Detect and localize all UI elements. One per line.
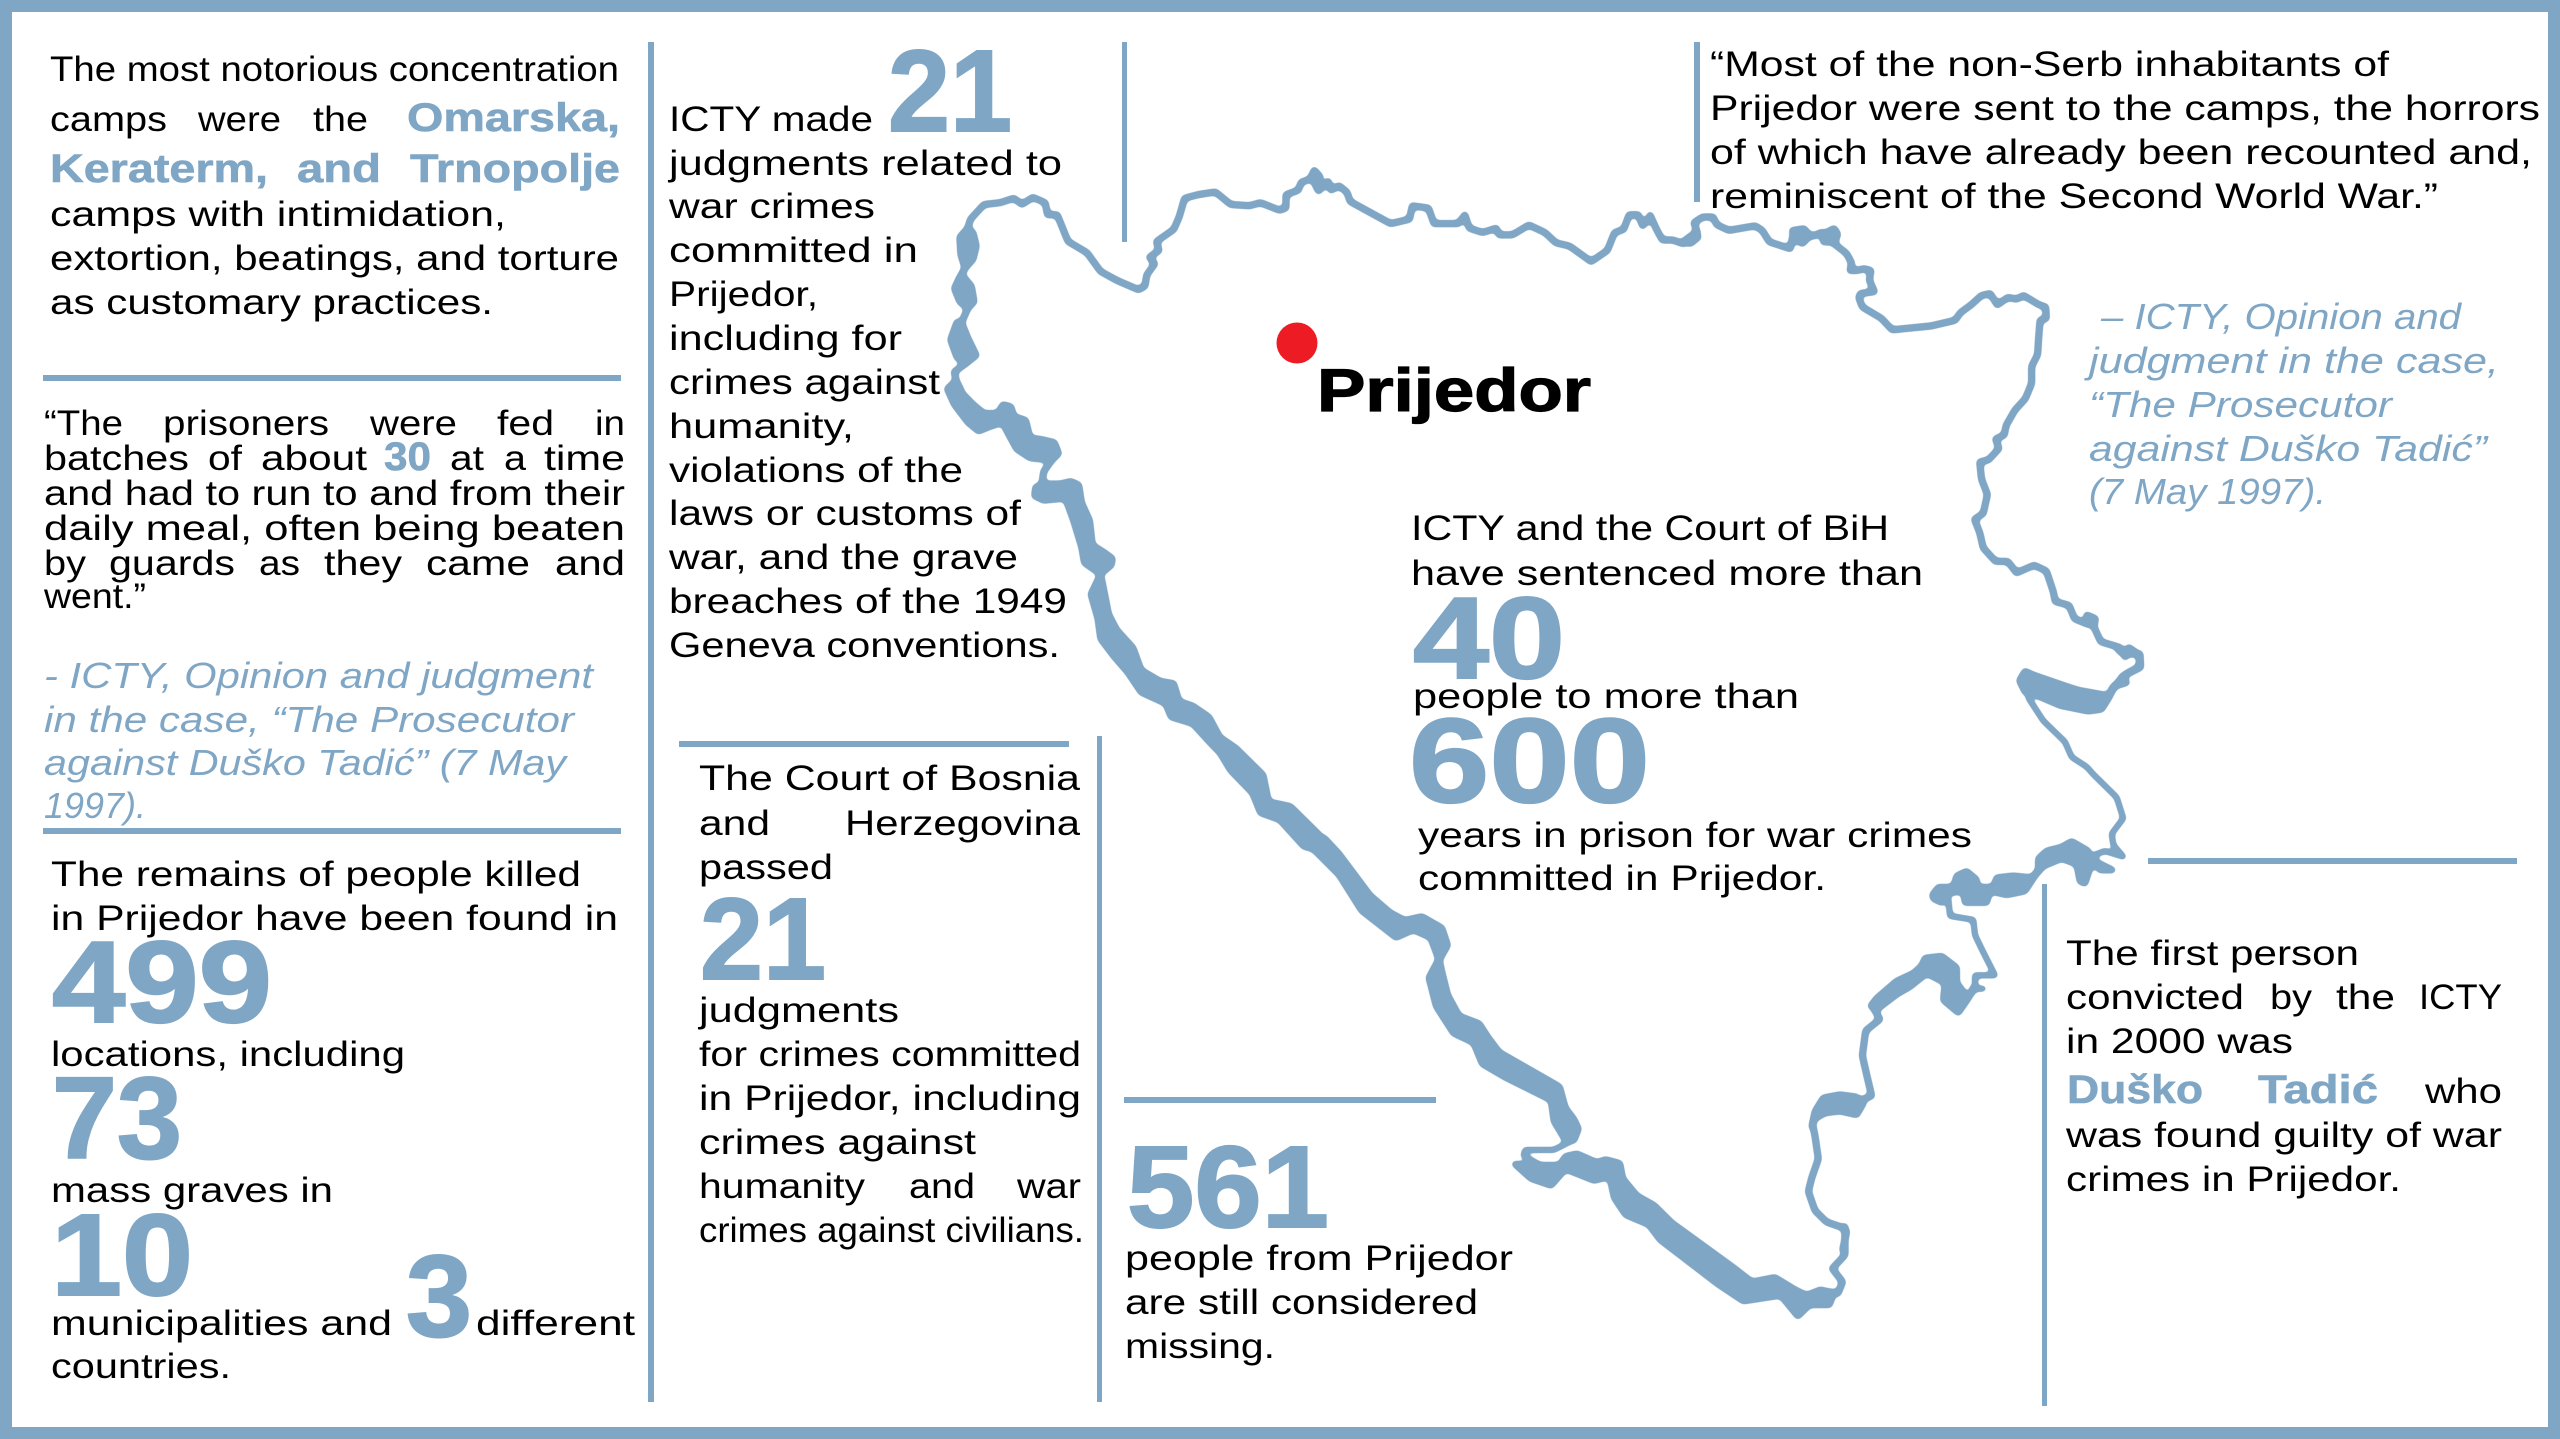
panel: Court of BiH judgments: Herzegovina bbox=[845, 804, 1081, 843]
panel: missing people: are still considered bbox=[1125, 1283, 1478, 1322]
panel: non-Serb inhabitants quote: reminiscent of the Second World War.” bbox=[1710, 177, 2438, 216]
panel: ICTY judgments: committed in bbox=[669, 231, 918, 270]
panel: prisoners quote: daily meal, often being beaten bbox=[44, 509, 625, 548]
panel: remains and mass graves: 10 bbox=[51, 1190, 193, 1320]
panel: notorious camps: camps with intimidation, bbox=[50, 195, 506, 234]
panel: prisoners quote: prisoners bbox=[163, 404, 329, 443]
panel: sentences: ICTY and the Court of BiH bbox=[1411, 509, 1889, 548]
panel: sentences: people to more than bbox=[1413, 677, 1799, 716]
panel: remains and mass graves bbox=[51, 855, 635, 1386]
panel: ICTY judgments: war, and the grave bbox=[668, 538, 1018, 577]
panel: ICTY judgments: laws or customs of bbox=[669, 494, 1021, 533]
panel: non-Serb inhabitants quote: “The Prosecutor bbox=[2089, 384, 2394, 425]
panel: Court of BiH judgments: war bbox=[1016, 1167, 1081, 1206]
panel: notorious camps: extortion, beatings, and torture bbox=[50, 239, 619, 278]
panel: Court of BiH judgments: judgments bbox=[698, 991, 899, 1030]
panel: ICTY judgments: ICTY made bbox=[669, 100, 873, 139]
panel: remains and mass graves: in Prijedor have been found in bbox=[51, 899, 618, 938]
panel: prisoners quote: in the case, “The Prosecutor bbox=[44, 699, 576, 740]
panel: missing people bbox=[1125, 1122, 1513, 1366]
panel: remains and mass graves: locations, including bbox=[51, 1035, 405, 1074]
panel: first person convicted: by bbox=[2270, 978, 2313, 1017]
panel: prisoners quote: against Duško Tadić” (7 May bbox=[44, 742, 568, 783]
panel: prisoners quote: 30 bbox=[384, 435, 431, 479]
panel: prisoners quote: and had to run to and from their bbox=[44, 474, 625, 513]
panel: remains and mass graves: different bbox=[476, 1304, 635, 1343]
panel: prisoners quote: went.” bbox=[43, 577, 146, 616]
panel: non-Serb inhabitants quote: Prijedor were sent to the camps, the horrors bbox=[1710, 89, 2540, 128]
panel: remains and mass graves: municipalities and bbox=[51, 1304, 392, 1343]
panel: ICTY judgments: crimes against bbox=[669, 363, 940, 402]
panel: ICTY judgments: 21 bbox=[888, 26, 1012, 156]
panel: notorious camps: camps bbox=[50, 100, 167, 139]
panel: first person convicted: the bbox=[2336, 978, 2395, 1017]
panel: Court of BiH judgments: crimes against bbox=[699, 1123, 976, 1162]
panel: first person convicted: crimes in Prijedor. bbox=[2066, 1160, 2401, 1199]
panel: sentences: 40 bbox=[1413, 573, 1565, 703]
panel: notorious camps: Trnopolje bbox=[410, 147, 620, 191]
map of Bosnia and Herzegovina bbox=[947, 170, 2141, 1316]
divider lines bbox=[648, 42, 2517, 1406]
panel: notorious camps: The most notorious concentration bbox=[50, 50, 619, 89]
panel: first person convicted: Duško bbox=[2067, 1068, 2203, 1112]
panel: remains and mass graves: The remains of people killed bbox=[51, 855, 581, 894]
panel: prisoners quote: 1997). bbox=[44, 785, 146, 826]
panel: prisoners quote: a bbox=[504, 439, 527, 478]
panel: remains and mass graves: countries. bbox=[51, 1347, 231, 1386]
panel: ICTY judgments: including for bbox=[669, 319, 902, 358]
panel: first person convicted: who bbox=[2424, 1072, 2502, 1111]
panel: sentences bbox=[1409, 509, 1972, 898]
panel: non-Serb inhabitants quote: – ICTY, Opinion and bbox=[2100, 296, 2462, 337]
panel: prisoners quote: - ICTY, Opinion and judgment bbox=[44, 655, 595, 696]
panel: ICTY judgments: war crimes bbox=[668, 187, 875, 226]
panel: Court of BiH judgments: 21 bbox=[700, 874, 826, 1004]
panel: first person convicted: convicted bbox=[2066, 978, 2244, 1017]
panel: Court of BiH judgments: passed bbox=[699, 848, 833, 887]
panel: prisoners quote: as bbox=[259, 544, 300, 583]
panel: ICTY judgments: Geneva conventions. bbox=[669, 626, 1060, 665]
panel: remains and mass graves: 73 bbox=[52, 1053, 182, 1183]
panel: notorious camps: and bbox=[297, 147, 381, 191]
panel: Court of BiH judgments: crimes against civilians. bbox=[699, 1211, 1084, 1250]
panel: first person convicted: in 2000 was bbox=[2066, 1022, 2293, 1061]
panel: prisoners quote: “The bbox=[44, 404, 123, 443]
panel: remains and mass graves: 3 bbox=[406, 1231, 472, 1361]
panel: prisoners quote: and bbox=[555, 544, 625, 583]
panel: Court of BiH judgments: and bbox=[909, 1167, 975, 1206]
panel: first person convicted: The first person bbox=[2066, 934, 2359, 973]
panel: missing people: 561 bbox=[1127, 1122, 1329, 1252]
panel: notorious camps: were bbox=[197, 100, 281, 139]
panel: ICTY judgments: judgments related to bbox=[668, 144, 1062, 183]
panel: first person convicted: Tadić bbox=[2258, 1068, 2378, 1112]
panel: Court of BiH judgments: in Prijedor, including bbox=[699, 1079, 1081, 1118]
panel: sentences: 600 bbox=[1409, 694, 1650, 828]
panel: prisoners quote: of bbox=[208, 439, 242, 478]
panel: ICTY judgments: Prijedor, bbox=[669, 275, 818, 314]
panel: Court of BiH judgments bbox=[698, 759, 1084, 1250]
panel: notorious camps: Omarska, bbox=[407, 96, 620, 140]
panel: ICTY judgments: breaches of the 1949 bbox=[669, 582, 1067, 621]
panel: ICTY judgments: humanity, bbox=[669, 407, 854, 446]
panel: notorious camps bbox=[50, 50, 620, 322]
panel: non-Serb inhabitants quote: “Most of the non-Serb inhabitants of bbox=[1710, 45, 2389, 84]
city marker: Prijedor bbox=[1276, 322, 1591, 424]
panel: prisoners quote: time bbox=[544, 439, 625, 478]
panel: notorious camps: as customary practices. bbox=[50, 283, 493, 322]
panel: remains and mass graves: 499 bbox=[52, 917, 272, 1047]
panel: prisoners quote: about bbox=[261, 439, 367, 478]
panel: prisoners quote: batches bbox=[44, 439, 189, 478]
panel: prisoners quote: came bbox=[426, 544, 530, 583]
panel: non-Serb inhabitants quote: (7 May 1997). bbox=[2089, 471, 2326, 512]
panel: prisoners quote: they bbox=[324, 544, 403, 583]
panel: non-Serb inhabitants quote bbox=[1710, 45, 2540, 512]
panel: non-Serb inhabitants quote: judgment in the case, bbox=[2083, 340, 2499, 381]
panel: sentences: have sentenced more than bbox=[1411, 554, 1923, 593]
panel: missing people: missing. bbox=[1125, 1327, 1275, 1366]
panel: missing people: people from Prijedor bbox=[1125, 1239, 1513, 1278]
panel: prisoners quote: by bbox=[44, 544, 87, 583]
panel: prisoners quote bbox=[43, 404, 625, 826]
panel: prisoners quote: guards bbox=[109, 544, 235, 583]
panel: sentences: committed in Prijedor. bbox=[1418, 859, 1826, 898]
panel: Court of BiH judgments: for crimes committed bbox=[699, 1035, 1081, 1074]
panel: ICTY judgments: violations of the bbox=[669, 451, 963, 490]
panel: sentences: years in prison for war crimes bbox=[1418, 816, 1972, 855]
panel: notorious camps: Keraterm, bbox=[50, 147, 268, 191]
panel: first person convicted: was found guilty of war bbox=[2065, 1116, 2502, 1155]
panel: prisoners quote: in bbox=[595, 404, 625, 443]
panel: prisoners quote: at bbox=[450, 439, 484, 478]
panel: remains and mass graves: mass graves in bbox=[51, 1171, 333, 1210]
panel: first person convicted: ICTY bbox=[2419, 978, 2502, 1017]
panel: prisoners quote: were bbox=[369, 404, 457, 443]
panel: ICTY judgments bbox=[668, 26, 1067, 665]
city marker: Prijedor: Prijedor bbox=[1317, 357, 1591, 424]
panel: first person convicted bbox=[2065, 934, 2502, 1199]
panel: notorious camps: the bbox=[313, 100, 368, 139]
panel: Court of BiH judgments: and bbox=[699, 804, 770, 843]
panel: Court of BiH judgments: humanity bbox=[699, 1167, 866, 1206]
panel: non-Serb inhabitants quote: against Duško Tadić” bbox=[2089, 428, 2489, 469]
panel: non-Serb inhabitants quote: of which have already been recounted and, bbox=[1710, 133, 2532, 172]
panel: Court of BiH judgments: The Court of Bosnia bbox=[699, 759, 1081, 798]
panel: prisoners quote: fed bbox=[497, 404, 554, 443]
